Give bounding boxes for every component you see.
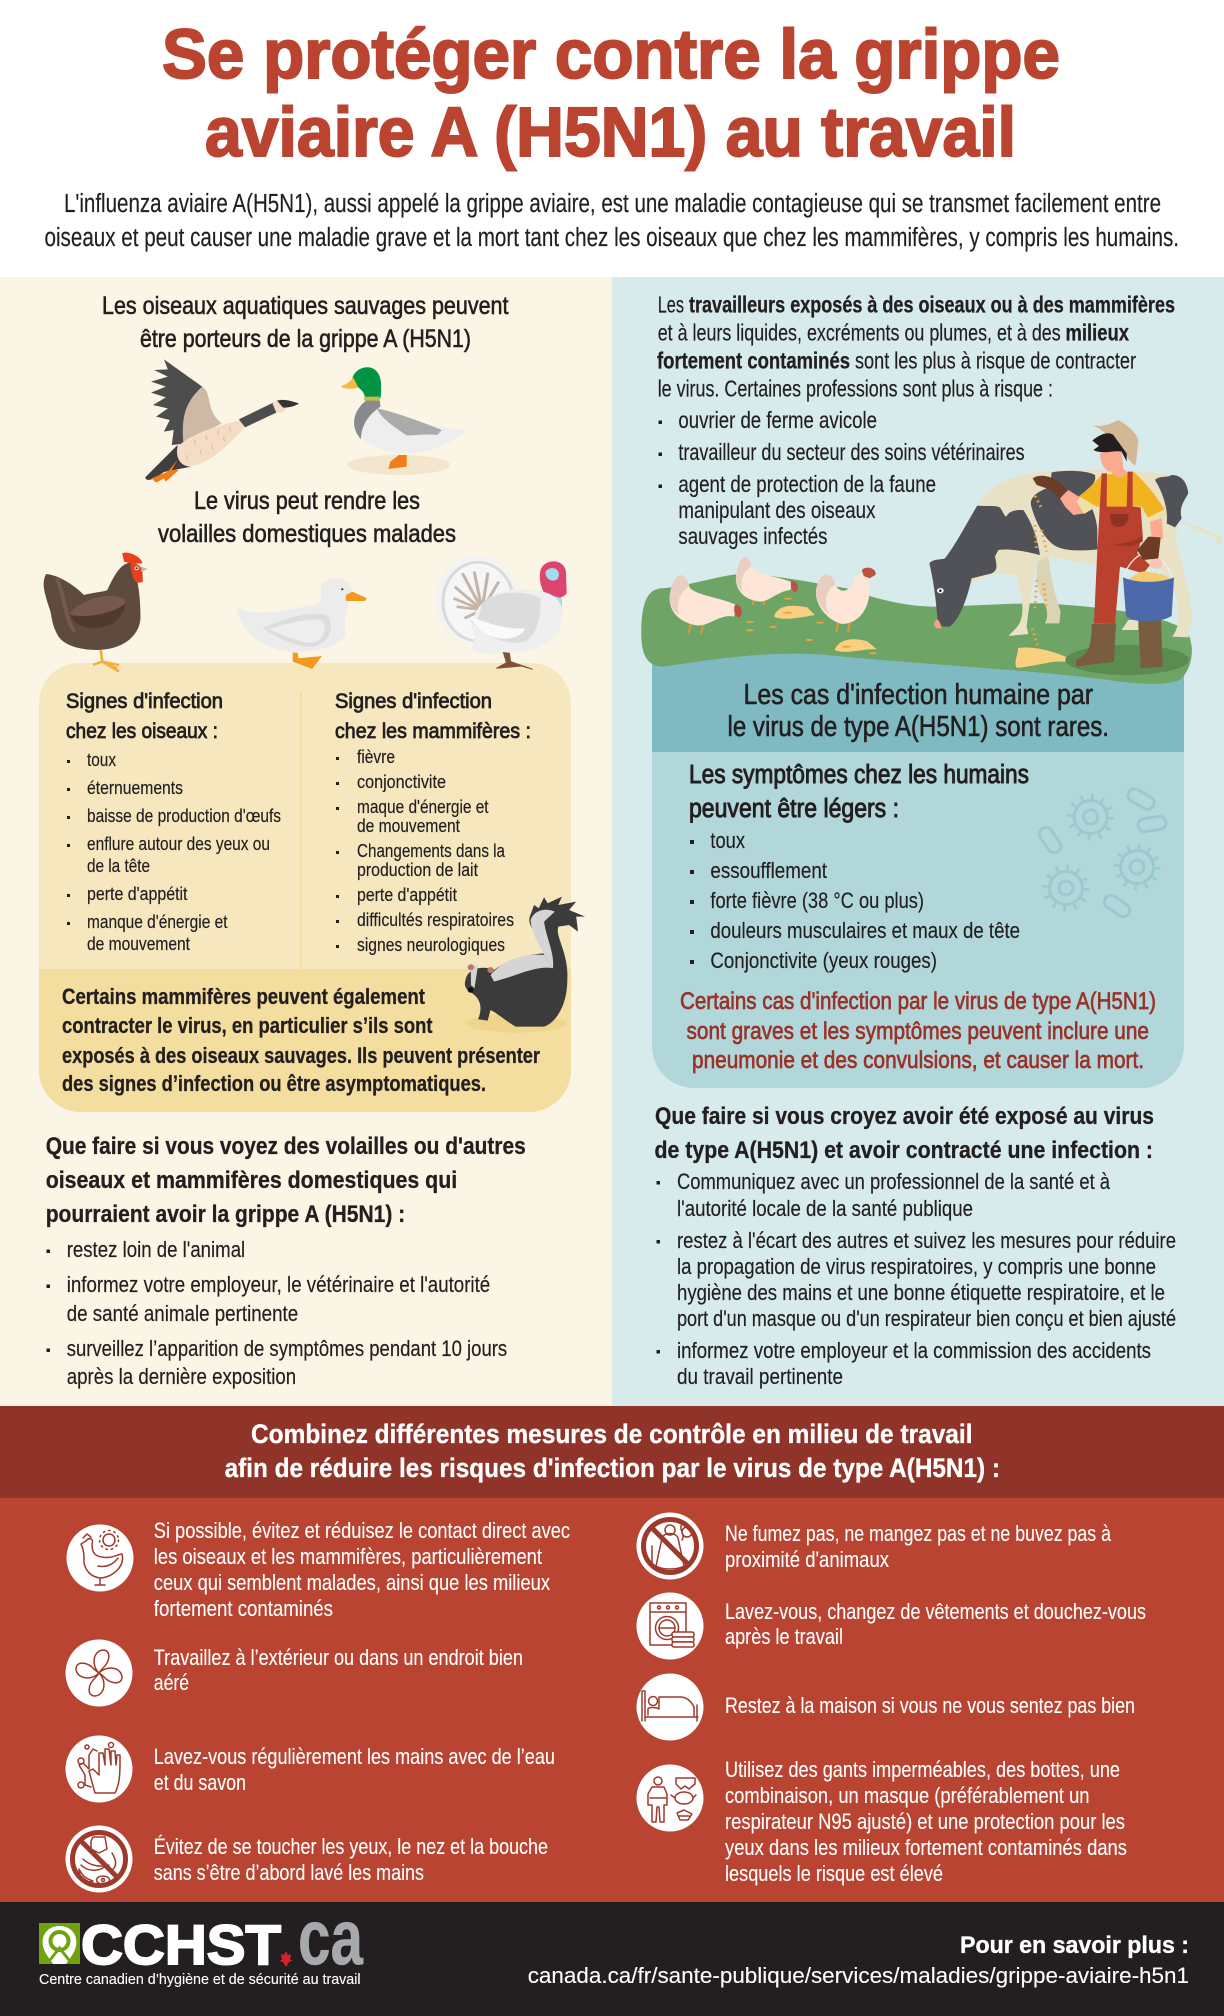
text: signs in mammals: perte d'appétit — [357, 884, 457, 905]
heading: what to do if exposed — [654, 1103, 1154, 1164]
text: avoid contact: ceux qui semblent malades, ainsi que les milieux — [154, 1570, 551, 1595]
illustration: farm scene with cow, hens and farmer — [641, 420, 1222, 684]
icon: hand washing — [66, 1736, 132, 1802]
text: signs in birds: enflure autour des yeux ou — [87, 833, 270, 854]
text: workers at risk: Les — [658, 292, 684, 318]
panel: right workers and humans — [612, 277, 1224, 1406]
illustration: green hill and hens — [641, 557, 1192, 684]
text: avoid contact: Si possible, évitez et réduisez le contact direct avec — [154, 1518, 570, 1543]
logo: CCHST: ca — [298, 1893, 363, 1981]
text: signs in birds: Signes d'infection — [66, 689, 223, 713]
icon: do not touch face — [66, 1826, 132, 1892]
text: signs in birds: perte d'appétit — [87, 883, 188, 904]
illustration: flying goose — [145, 359, 299, 483]
text: do not touch face: sans s’être d’abord lavé les mains — [154, 1860, 424, 1885]
list: exposure actions — [656, 1169, 1176, 1389]
heading: human cases are rare: le virus de type A(H5N1) sont rares. — [728, 711, 1109, 743]
heading: what to do if poultry sick: Que faire si vous voyez des volailles ou d'autres — [46, 1133, 526, 1160]
illustration: skunk — [465, 897, 585, 1033]
text: workers at risk: milieux — [1066, 320, 1129, 346]
text: change clothes: après le travail — [725, 1624, 843, 1649]
callout: severe cases: pneumonie et des convulsions, et causer la mort. — [692, 1047, 1144, 1074]
callout: severe cases — [680, 988, 1156, 1074]
icon: virus particles — [1037, 786, 1167, 919]
text: signs in mammals: difficultés respiratoires — [357, 909, 514, 930]
list: at-risk occupations — [658, 407, 1025, 549]
title: Se protéger contre la grippe — [162, 15, 1060, 93]
text: signs in mammals: conjonctivite — [357, 771, 446, 792]
panel: left birds and mammals — [0, 277, 612, 1406]
icon: bed — [636, 1674, 704, 1740]
text: signs in mammals: signes neurologiques — [357, 934, 505, 955]
list: symptoms: essoufflement — [710, 858, 828, 883]
text: do not touch face — [154, 1834, 548, 1885]
text: mammals can contract: exposés à des oiseaux sauvages. Ils peuvent présenter — [62, 1043, 540, 1068]
text: workers at risk: fortement contaminés — [657, 348, 850, 374]
heading: what to do if poultry sick: oiseaux et mammifères domestiques qui — [46, 1167, 457, 1194]
illustration: brown hen — [44, 553, 148, 672]
list: exposure actions: informez votre employeur et la commission des accidents — [677, 1338, 1151, 1363]
heading: mild symptoms: peuvent être légers : — [689, 795, 899, 823]
list: exposure actions: Communiquez avec un professionnel de la santé et à — [677, 1169, 1111, 1194]
heading: mild symptoms: Les symptômes chez les humains — [689, 761, 1029, 789]
illustration: white duck — [237, 578, 367, 669]
icon: no smoking or eating — [636, 1512, 704, 1580]
text: no smoking or eating: Ne fumez pas, ne mangez pas et ne buvez pas à — [725, 1521, 1111, 1546]
title — [162, 15, 1060, 171]
icon: washing machine — [636, 1592, 704, 1660]
text: mammals can contract — [62, 984, 540, 1096]
text: protective equipment: Utilisez des gants imperméables, des bottes, une — [725, 1757, 1120, 1782]
text: signs in birds: manque d'énergie et — [87, 911, 228, 932]
text: signs in mammals: Signes d'infection — [335, 689, 492, 713]
heading: mild symptoms — [689, 761, 1029, 823]
text: signs in birds: de mouvement — [87, 933, 190, 954]
list: poultry actions: après la dernière exposition — [67, 1364, 296, 1389]
logo: CCHST: Centre canadien d’hygiène et de sécurité au travail — [39, 1971, 361, 1988]
heading: wild waterfowl: Les oiseaux aquatiques sauvages peuvent — [102, 292, 509, 320]
list: poultry actions: surveillez l’apparition de symptômes pendant 10 jours — [67, 1336, 507, 1361]
text: avoid contact — [154, 1518, 570, 1621]
heading: wild waterfowl: être porteurs de la grippe A (H5N1) — [140, 325, 471, 353]
intro text — [44, 190, 1179, 252]
text: signs in birds: éternuements — [87, 777, 183, 798]
text: do not touch face: Évitez de se toucher les yeux, le nez et la bouche — [154, 1834, 548, 1859]
panel: signs of infection — [39, 663, 571, 1112]
text: signs in mammals: maque d'énergie et — [357, 796, 489, 817]
list: symptoms: douleurs musculaires et maux de tête — [710, 918, 1020, 943]
text: mammals can contract: contracter le virus, en particulier s’ils sont — [62, 1013, 433, 1038]
icon: personal protective equipment — [636, 1764, 704, 1832]
logo: CCHST — [39, 1893, 363, 1988]
list: exposure actions: l'autorité locale de la santé publique — [677, 1196, 973, 1221]
illustration: cow — [929, 470, 1222, 645]
heading: domestic poultry: Le virus peut rendre les — [194, 487, 420, 515]
text: mammals can contract: Certains mammifères peuvent également — [62, 984, 426, 1009]
text: signs in mammals: Changements dans la — [357, 840, 506, 861]
text: workers at risk: le virus. Certaines professions sont plus à risque : — [658, 376, 1053, 402]
text: learn more link: canada.ca/fr/sante-publique/services/maladies/grippe-aviaire-h5n1 — [528, 1963, 1189, 1988]
text: signs in birds: baisse de production d'œufs — [87, 805, 281, 826]
list: at-risk occupations: sauvages infectés — [678, 523, 828, 549]
heading: what to do if poultry sick: pourraient avoir la grippe A (H5N1) : — [46, 1201, 405, 1228]
list: symptoms: Conjonctivite (yeux rouges) — [710, 948, 937, 973]
text: ventilation: Travaillez à l’extérieur ou dans un endroit bien — [154, 1645, 523, 1670]
callout: severe cases: sont graves et les symptômes peuvent inclure une — [686, 1018, 1149, 1045]
heading: what to do if poultry sick — [46, 1133, 526, 1228]
list: poultry actions: de santé animale pertinente — [67, 1301, 298, 1326]
text: signs in birds — [66, 689, 281, 954]
text: protective equipment: respirateur N95 ajusté) et une protection pour les — [725, 1809, 1125, 1834]
logo: CCHST: CCHST — [81, 1913, 281, 1976]
illustration: feed pile — [1015, 648, 1066, 668]
heading: what to do if exposed: de type A(H5N1) et avoir contracté une infection : — [654, 1137, 1153, 1164]
list: symptoms: forte fièvre (38 °C ou plus) — [710, 888, 924, 913]
heading: domestic poultry: volailles domestiques malades — [158, 520, 456, 548]
icon: fan — [66, 1640, 132, 1706]
panel: human symptoms — [652, 650, 1184, 1088]
text: ventilation — [154, 1645, 523, 1695]
text: signs in mammals: production de lait — [357, 859, 478, 880]
heading: what to do if exposed: Que faire si vous croyez avoir été exposé au virus — [655, 1103, 1154, 1130]
list: poultry actions: informez votre employeur, le vétérinaire et l'autorité — [67, 1272, 490, 1297]
text: wash hands — [154, 1744, 555, 1795]
text: signs in birds: de la tête — [87, 855, 150, 876]
text: learn more link: Pour en savoir plus : — [960, 1932, 1189, 1959]
text: workers at risk: sont les plus à risque de contracter — [855, 348, 1136, 374]
text: avoid contact: les oiseaux et les mammifères, particulièrement — [154, 1544, 543, 1569]
text: protective equipment: lesquels le risque est élevé — [725, 1861, 943, 1886]
text: avoid contact: fortement contaminés — [154, 1596, 333, 1621]
list: at-risk occupations: ouvrier de ferme avicole — [678, 407, 877, 433]
list: exposure actions: du travail pertinente — [677, 1364, 843, 1389]
text: wash hands: Lavez-vous régulièrement les mains avec de l’eau — [154, 1744, 555, 1769]
text: protective equipment: combinaison, un masque (préférablement un — [725, 1783, 1090, 1808]
text: protective equipment: yeux dans les milieux fortement contaminés dans — [725, 1835, 1127, 1860]
list: poultry actions: restez loin de l'animal — [67, 1237, 245, 1262]
footer — [0, 1893, 1224, 2016]
text: mammals can contract: des signes d’infection ou être asymptomatiques. — [62, 1071, 486, 1096]
heading: human cases are rare — [728, 679, 1109, 743]
list: at-risk occupations: travailleur du secteur des soins vétérinaires — [678, 439, 1025, 465]
text: signs in mammals: fièvre — [357, 746, 395, 767]
illustration: turkey — [436, 555, 567, 669]
list: poultry actions — [46, 1237, 507, 1389]
text: no smoking or eating — [725, 1521, 1111, 1572]
text: signs in birds: chez les oiseaux : — [66, 719, 218, 743]
title: aviaire A (H5N1) au travail — [205, 93, 1016, 171]
text: wash hands: et du savon — [154, 1770, 246, 1795]
heading: domestic poultry — [158, 487, 456, 548]
heading: human cases are rare: Les cas d'infection humaine par — [744, 679, 1093, 711]
text: signs in mammals: de mouvement — [357, 815, 460, 836]
list: at-risk occupations: agent de protection de la faune — [678, 471, 936, 497]
text: signs in mammals — [335, 689, 531, 955]
text: ventilation: aéré — [154, 1670, 189, 1695]
text: workers at risk — [657, 292, 1175, 402]
text: change clothes — [725, 1599, 1146, 1649]
text: signs in birds: toux — [87, 749, 117, 770]
banner: combine control measures — [0, 1406, 1224, 1498]
illustration: falling feed grains — [1032, 496, 1047, 645]
banner: combine control measures: afin de réduire les risques d'infection par le virus de type A(H5N1) : — [225, 1453, 1000, 1483]
banner: combine control measures: Combinez différentes mesures de contrôle en milieu de travail — [251, 1419, 972, 1449]
panel: control measures — [0, 1406, 1224, 1902]
text: no smoking or eating: proximité d'animaux — [725, 1547, 890, 1572]
heading: wild waterfowl — [102, 292, 509, 353]
text: workers at risk: et à leurs liquides, excréments ou plumes, et à des — [658, 320, 1061, 346]
list: symptoms: toux — [710, 828, 746, 853]
text: learn more link — [528, 1932, 1189, 1988]
list: symptoms — [690, 828, 1020, 973]
illustration: mallard duck — [341, 367, 465, 475]
list: at-risk occupations: manipulant des oiseaux — [678, 497, 876, 523]
text: signs in mammals: chez les mammifères : — [335, 719, 531, 743]
icon: chicken and virus — [66, 1524, 134, 1592]
text: protective equipment — [725, 1757, 1127, 1886]
illustration: farmer — [1033, 420, 1174, 668]
